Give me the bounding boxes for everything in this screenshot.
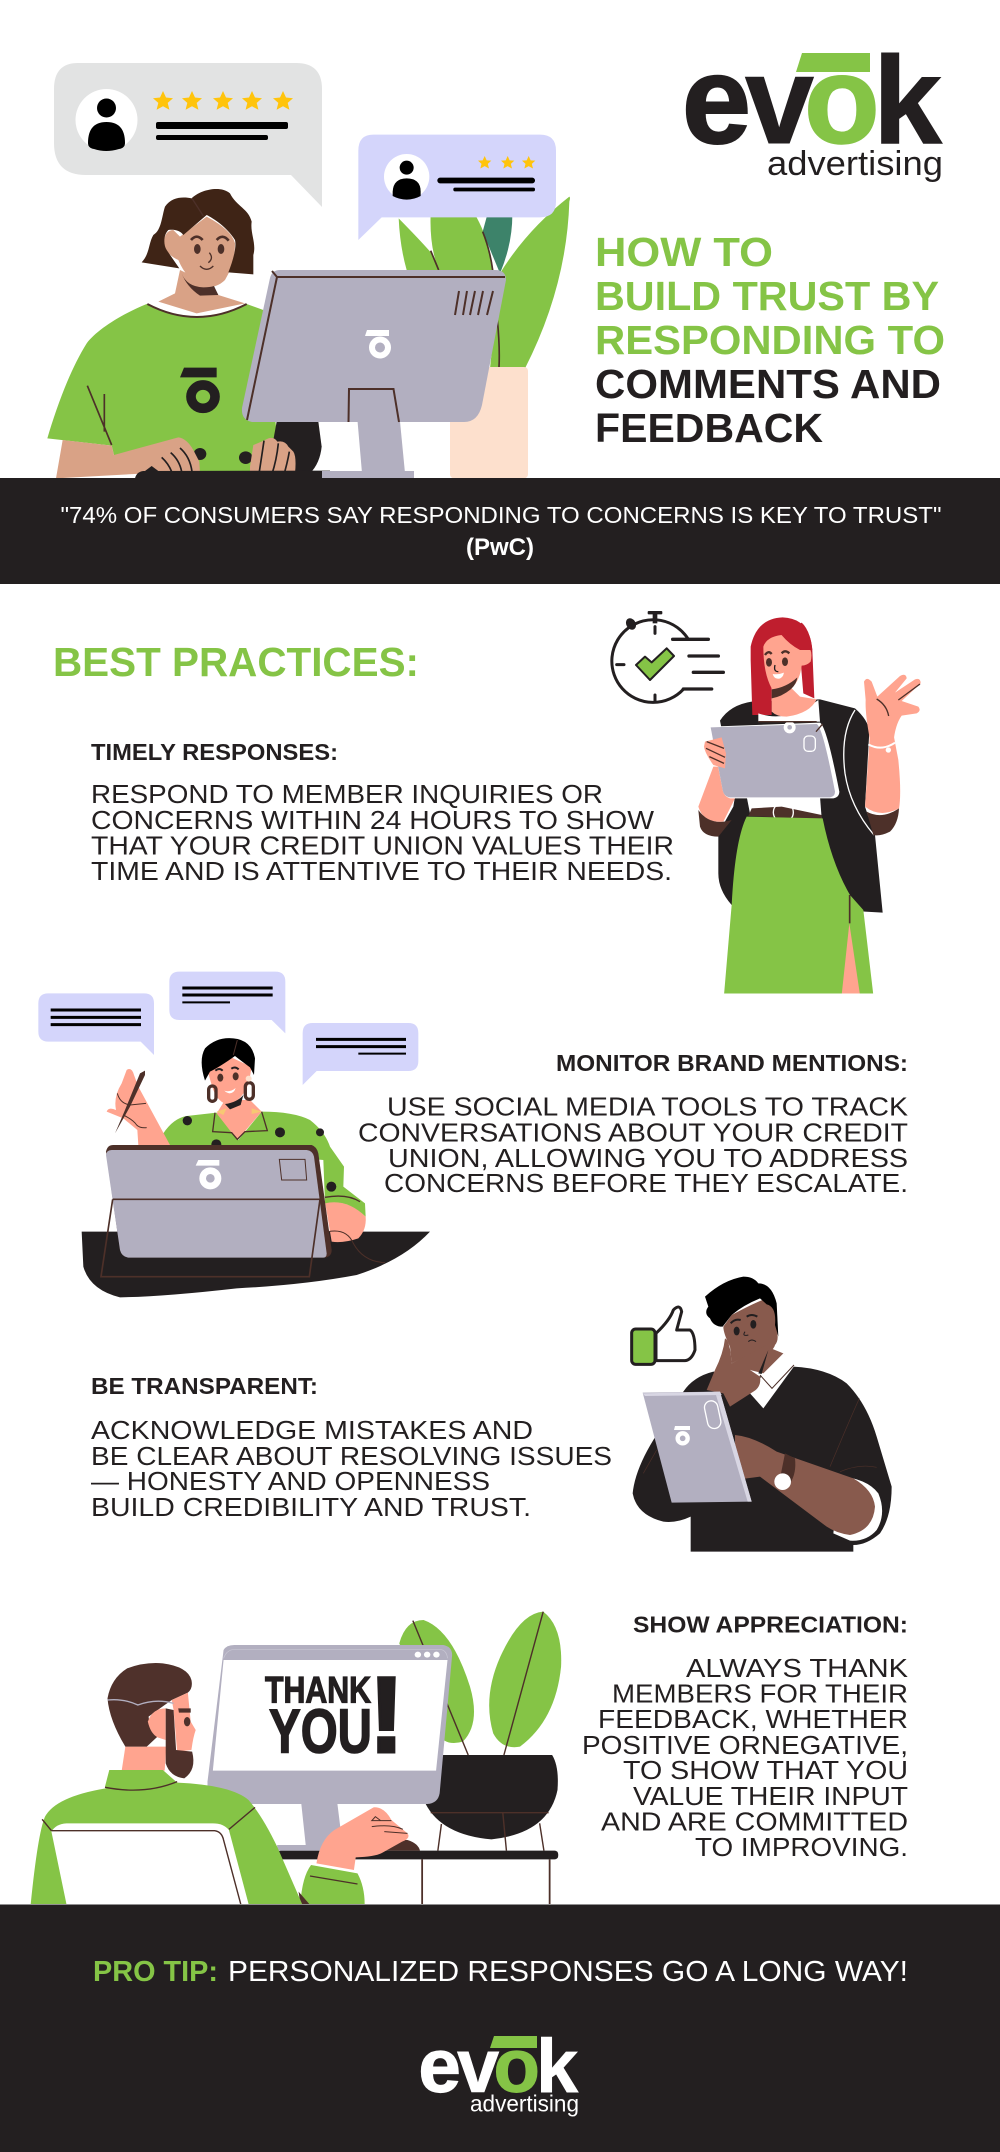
speech bubble: five star review xyxy=(54,63,322,207)
quote banner xyxy=(0,478,1000,584)
section: be transparent: BE TRANSPARENT: xyxy=(91,1373,318,1399)
illustration: computer monitor back xyxy=(242,270,506,478)
illustration: man at computer saying thank you xyxy=(31,1612,561,1904)
speech bubble: three star review xyxy=(358,135,556,240)
evok advertising logo footer: v xyxy=(457,2024,499,2109)
section: monitor brand mentions xyxy=(358,1050,909,1198)
thank you text: THANK xyxy=(265,1670,371,1710)
section: show appreciation: SHOW APPRECIATION: xyxy=(633,1612,908,1638)
title xyxy=(595,229,945,451)
section: be transparent: ACKNOWLEDGE MISTAKES AND xyxy=(91,1415,533,1445)
quote banner: (PwC) xyxy=(466,534,534,561)
woman figure xyxy=(163,1038,366,1242)
evok advertising logo top xyxy=(682,32,943,183)
section: timely responses xyxy=(91,739,674,886)
section: show appreciation: POSITIVE ORNEGATIVE, xyxy=(582,1730,908,1760)
section: show appreciation: VALUE THEIR INPUT xyxy=(633,1781,908,1811)
evok advertising logo top: o xyxy=(804,32,880,170)
hand with pen xyxy=(107,1069,170,1145)
section: timely responses: RESPOND TO MEMBER INQUIRIES OR xyxy=(91,779,603,809)
section: show appreciation: AND ARE COMMITTED xyxy=(601,1806,908,1836)
section: show appreciation: ALWAYS THANK xyxy=(686,1653,909,1683)
section: monitor brand mentions: USE SOCIAL MEDIA TOOLS TO TRACK xyxy=(387,1092,909,1122)
section: show appreciation: TO IMPROVING. xyxy=(695,1832,908,1862)
evok advertising logo top: k xyxy=(873,32,943,170)
section: timely responses: CONCERNS WITHIN 24 HOURS TO SHOW xyxy=(91,805,654,835)
heading: best practices: BEST PRACTICES: xyxy=(53,639,419,685)
section: monitor brand mentions: MONITOR BRAND MENTIONS: xyxy=(556,1050,908,1076)
thank you text: YOU xyxy=(269,1698,372,1766)
evok advertising logo footer: advertising xyxy=(470,2090,579,2116)
speech bubble right xyxy=(303,1023,418,1085)
section: timely responses: TIME AND IS ATTENTIVE TO THEIR NEEDS. xyxy=(91,856,672,886)
footer banner xyxy=(0,1904,1000,2152)
title: HOW TO xyxy=(595,229,773,275)
section: be transparent: BUILD CREDIBILITY AND TRUST. xyxy=(91,1492,531,1522)
title: BUILD TRUST BY xyxy=(595,273,939,319)
icon: stopwatch with check mark xyxy=(612,611,723,702)
section: be transparent: — HONESTY AND OPENNESS xyxy=(91,1466,490,1496)
section: be transparent: BE CLEAR ABOUT RESOLVING ISSUES xyxy=(91,1441,612,1471)
speech bubble center xyxy=(169,972,285,1033)
title: FEEDBACK xyxy=(595,405,823,451)
evok advertising logo top: advertising xyxy=(767,145,943,183)
evok advertising logo top: e xyxy=(682,32,751,170)
evok advertising logo footer: e xyxy=(418,2024,461,2109)
illustration: woman at laptop with speech bubbles xyxy=(38,972,430,1297)
section: be transparent xyxy=(91,1373,612,1522)
title: RESPONDING TO xyxy=(595,317,945,363)
quote banner: "74% OF CONSUMERS SAY RESPONDING TO CONCERNS IS KEY TO TRUST" xyxy=(60,502,941,528)
laptop xyxy=(101,1145,385,1277)
man from behind xyxy=(31,1663,302,1904)
section: show appreciation: FEEDBACK, WHETHER xyxy=(598,1704,908,1734)
section: monitor brand mentions: CONVERSATIONS ABOUT YOUR CREDIT xyxy=(358,1118,908,1148)
section: show appreciation: TO SHOW THAT YOU xyxy=(623,1755,908,1785)
illustration: plant behind monitor xyxy=(399,197,570,478)
evok advertising logo footer: o xyxy=(494,2024,540,2109)
thank you text: ! xyxy=(369,1654,404,1775)
illustration: woman at computer xyxy=(47,189,330,478)
icon: thumbs up xyxy=(632,1307,695,1364)
section: timely responses: TIMELY RESPONSES: xyxy=(91,739,338,765)
section: monitor brand mentions: CONCERNS BEFORE THEY ESCALATE. xyxy=(384,1168,908,1198)
section: monitor brand mentions: UNION, ALLOWING YOU TO ADDRESS xyxy=(388,1143,908,1173)
mouse and hand xyxy=(299,1807,420,1904)
evok advertising logo footer xyxy=(418,2024,579,2116)
title: COMMENTS AND xyxy=(595,361,941,407)
pro tip: PERSONALIZED RESPONSES GO A LONG WAY! xyxy=(228,1956,908,1988)
plant and pot xyxy=(399,1612,561,1851)
pro tip: PRO TIP: xyxy=(93,1956,218,1988)
desk xyxy=(82,1232,430,1297)
desk xyxy=(277,1851,558,1904)
speech bubble left xyxy=(38,993,154,1055)
evok advertising logo footer: k xyxy=(536,2024,579,2109)
illustration: man with tablet xyxy=(633,1277,892,1552)
evok advertising logo top: v xyxy=(745,32,814,170)
section: show appreciation: MEMBERS FOR THEIR xyxy=(612,1678,908,1708)
section: show appreciation xyxy=(582,1612,909,1862)
illustration: woman with tablet xyxy=(698,617,921,995)
section: timely responses: THAT YOUR CREDIT UNION VALUES THEIR xyxy=(91,830,674,860)
thank you text xyxy=(265,1654,404,1775)
monitor xyxy=(207,1645,452,1851)
